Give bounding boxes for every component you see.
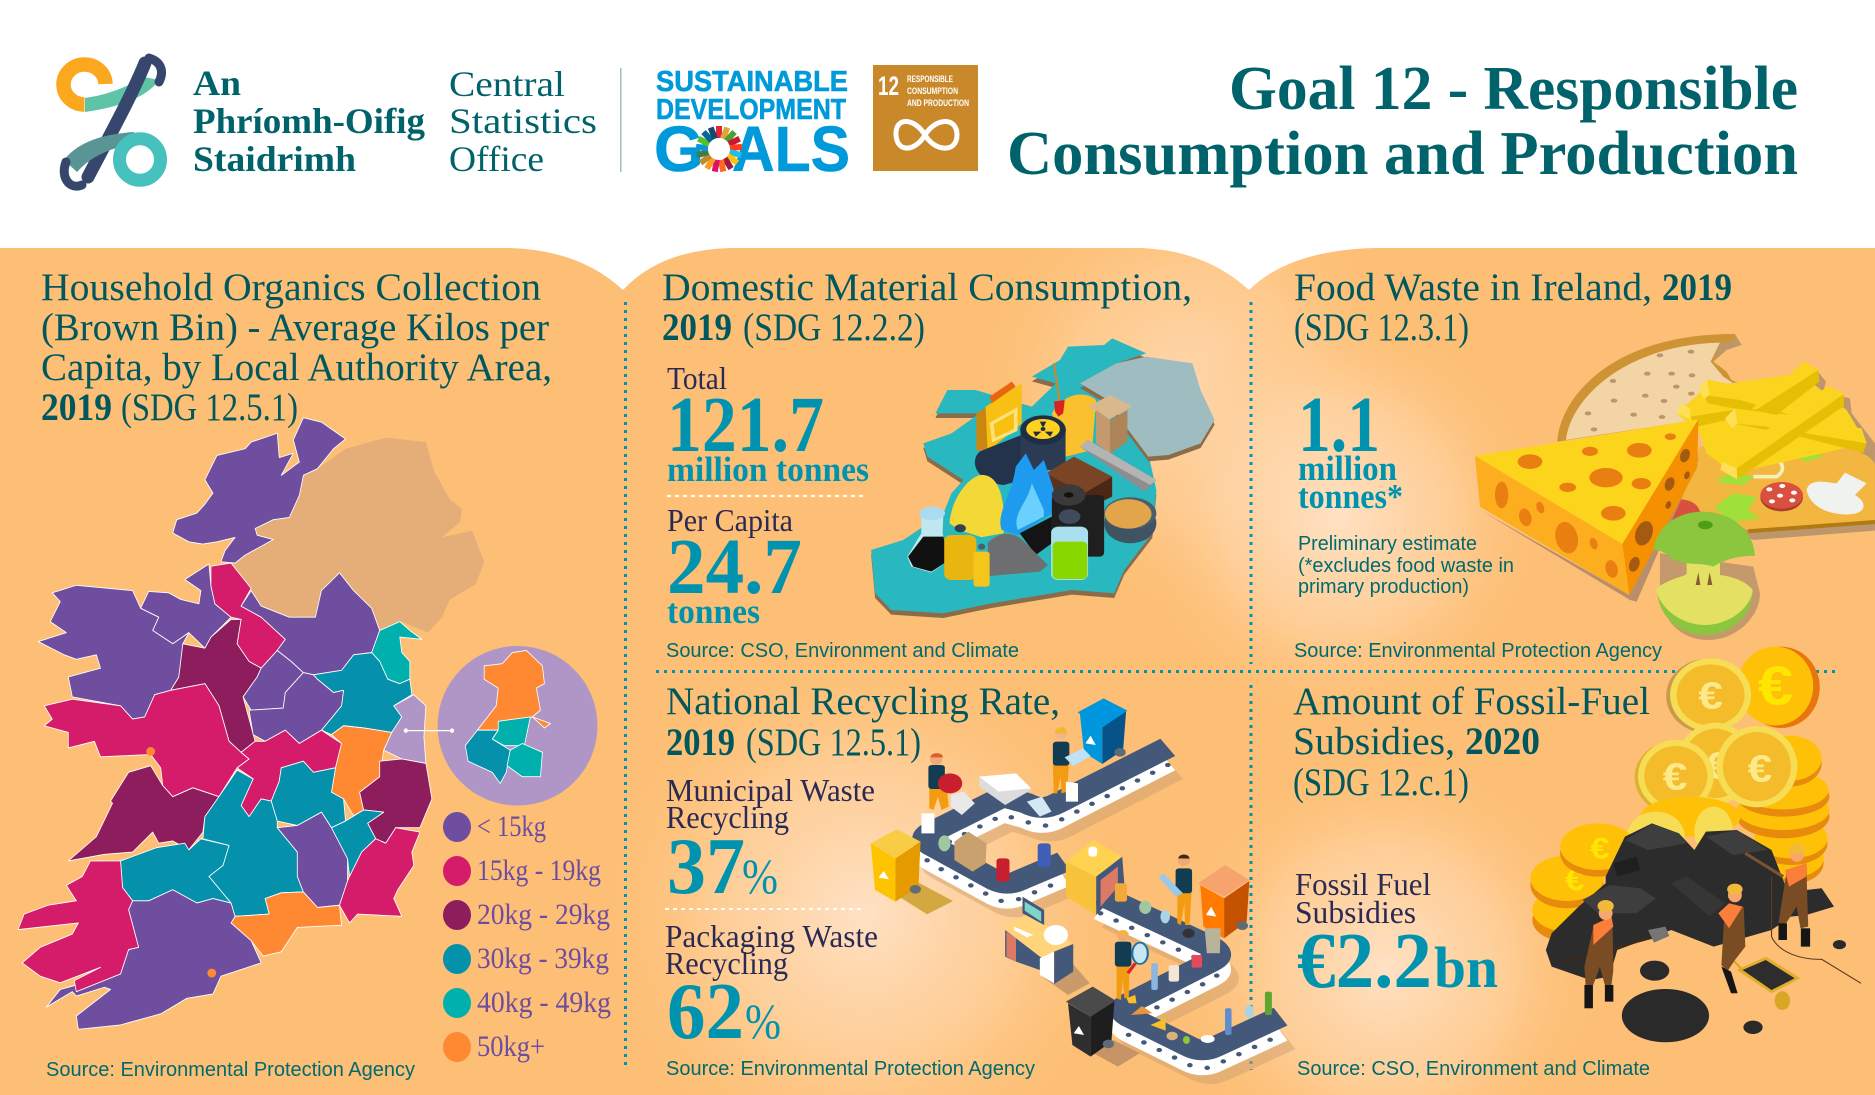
- logo text: Irish name: Staidrimh: [193, 139, 356, 179]
- workers: [928, 727, 1192, 1000]
- heading: fossil fuel subsidies: [1293, 680, 1650, 804]
- jerrycan: [976, 382, 1022, 452]
- panel: fossil fuel subsidies: [1293, 647, 1861, 1080]
- stat: per capita: tonnes: [667, 592, 760, 631]
- legend: [443, 810, 611, 1063]
- note: food waste: (*excludes food waste in: [1298, 555, 1514, 577]
- header: [64, 55, 1798, 188]
- illustration: food: [1475, 334, 1875, 640]
- stat: packaging waste recycling: [665, 918, 878, 1056]
- blue bin: [1078, 698, 1127, 764]
- logo text: English name: [449, 64, 597, 179]
- black pipe roll: [1020, 484, 1104, 557]
- source: panel 4: Source: Environmental Protection Agency: [666, 1058, 1035, 1080]
- icon: goal 12 badge: RESPONSIBLE: [907, 74, 953, 84]
- coin: middle left: €: [1705, 743, 1730, 787]
- logo text: Irish name: [193, 63, 425, 179]
- SDG wordmark: SUSTAINABLE: [656, 66, 848, 98]
- heading: national recycling rate: National Recycling Rate,: [666, 680, 1060, 723]
- icon: goal 12 badge: CONSUMPTION: [907, 86, 958, 96]
- icon: SDG colour wheel: [696, 126, 742, 172]
- heading: fossil fuel subsidies: 2020: [1465, 720, 1540, 763]
- stat: municipal waste recycling: [666, 772, 875, 911]
- heading: domestic material consumption: (SDG 12.2.2): [743, 306, 925, 349]
- coal rocks and pile: [1622, 940, 1846, 1042]
- stat: total: million tonnes: [667, 450, 869, 489]
- coin stack: right: [1737, 736, 1829, 885]
- steel bar: [1080, 440, 1156, 492]
- heading: household organics: (Brown Bin) - Average Kilos per: [41, 306, 549, 349]
- heading: fossil fuel subsidies: Subsidies,: [1293, 720, 1455, 763]
- shovel: [1054, 363, 1065, 417]
- title: [1007, 55, 1798, 188]
- conveyor: upper belt: [926, 747, 1176, 907]
- stat: total: 121.7: [667, 382, 824, 469]
- panel: domestic material consumption: [662, 266, 1215, 662]
- coin stack: centre and left: €: [1565, 863, 1584, 896]
- legend: 40kg - 49kg: [477, 986, 611, 1019]
- SDG wordmark: ALS: [732, 113, 850, 185]
- stat: food waste: million: [1298, 449, 1397, 488]
- stat: packaging waste recycling: %: [745, 993, 781, 1049]
- conveyor: lower belt: [1101, 895, 1288, 1074]
- logo text: English name: Statistics: [449, 101, 597, 141]
- coin: middle right: [1716, 726, 1797, 807]
- stat: per capita: [667, 502, 802, 631]
- city marker: Galway: [146, 747, 155, 756]
- logo text: Irish name: An: [193, 63, 241, 103]
- legend: 50kg+: [477, 1030, 545, 1063]
- yellow bottles: [944, 524, 990, 587]
- heading: household organics: Household Organics Collection: [41, 266, 541, 309]
- rock: [988, 534, 1048, 576]
- heading: food waste: 2019: [1662, 266, 1732, 309]
- gold ore: [1052, 395, 1096, 457]
- wheelbarrow: [1723, 950, 1800, 1010]
- logo text: English name: Office: [449, 139, 544, 179]
- bowl of sand: [1104, 497, 1156, 543]
- yellow bin: [871, 829, 953, 914]
- coin: front: €: [1663, 754, 1687, 798]
- apple core: [1653, 512, 1760, 640]
- source: panel 5: Source: CSO, Environment and Climate: [1297, 1058, 1650, 1080]
- scanning machine: [1066, 840, 1124, 915]
- pizza slice: [1660, 433, 1875, 540]
- dotted dividers: [626, 302, 1840, 1070]
- worker: top: [1053, 727, 1091, 793]
- icon: goal 12 badge: [873, 65, 978, 171]
- air hose: [1772, 877, 1861, 983]
- city marker: Cork: [207, 969, 216, 977]
- coin: top left: €: [1698, 673, 1723, 717]
- stat: food waste: 1.1: [1298, 382, 1380, 469]
- worker: inspector: [1115, 930, 1148, 1000]
- legend: 20kg - 29kg: [477, 898, 610, 931]
- worker: left: [928, 753, 962, 810]
- legend: 30kg - 39kg: [477, 942, 609, 975]
- illustration: coins, coal and miners: [1530, 647, 1861, 1042]
- coin: front: [1635, 740, 1714, 813]
- miner: drill: [1745, 844, 1810, 947]
- coin: top right: €: [1758, 654, 1793, 716]
- stat: food waste: [1298, 382, 1403, 516]
- map of Ireland by local authority: [18, 418, 597, 1029]
- legend: < 15kg: [477, 810, 546, 843]
- miner: shovel: [1563, 900, 1669, 1008]
- stat: fossil fuel subsidies: bn: [1434, 935, 1498, 1000]
- heading: fossil fuel subsidies: Amount of Fossil-Fuel: [1293, 680, 1650, 723]
- coin stack: centre and left: €: [1590, 832, 1610, 865]
- coal heap: [1546, 823, 1834, 980]
- cardboard box: [1088, 395, 1132, 453]
- source: panel 2: Source: CSO, Environment and Climate: [666, 640, 1019, 662]
- SDG wordmark: [654, 66, 850, 185]
- coin: middle left: [1677, 723, 1754, 804]
- wood stack: [1046, 457, 1112, 510]
- source: panel 1: Source: Environmental Protection Agency: [46, 1059, 415, 1081]
- stat: municipal waste recycling: %: [742, 848, 778, 904]
- heading: national recycling rate: 2019: [666, 721, 735, 764]
- stat: municipal waste recycling: Recycling: [666, 799, 789, 835]
- inset: Dublin circle: [404, 646, 597, 806]
- illustration: recycling conveyor: [871, 698, 1288, 1074]
- stat: packaging waste recycling: 62: [667, 968, 744, 1056]
- logo text: English name: Central: [449, 64, 565, 104]
- radioactive barrel: [1020, 415, 1066, 470]
- bread slice: [1557, 334, 1742, 442]
- panel: food waste: [1294, 266, 1875, 662]
- stat: fossil fuel subsidies: Fossil Fuel: [1295, 866, 1431, 902]
- chips: [1677, 362, 1875, 479]
- coin: middle right: €: [1748, 747, 1772, 790]
- desk with monitor: [1003, 897, 1090, 995]
- SDG wordmark: DEVELOPMENT: [656, 94, 846, 126]
- heading: national recycling rate: (SDG 12.5.1): [746, 721, 921, 764]
- legend: 15kg - 19kg: [477, 854, 601, 887]
- worker: right: [1158, 854, 1192, 925]
- illustration: materials on Ireland map: [871, 338, 1215, 618]
- coin stack: centre and left: [1530, 797, 1741, 942]
- stat: fossil fuel subsidies: [1295, 866, 1498, 1005]
- heading: food waste: Food Waste in Ireland,: [1294, 266, 1652, 309]
- icon: CSO logo: [64, 58, 162, 186]
- stat: total: Total: [667, 360, 727, 396]
- hay: [949, 475, 1004, 537]
- stat: fossil fuel subsidies: €2.2: [1297, 918, 1432, 1005]
- stat: per capita: Per Capita: [667, 502, 793, 538]
- note: food waste: primary production): [1298, 576, 1469, 598]
- orange bin: [1198, 865, 1249, 938]
- stat: packaging waste recycling: Recycling: [665, 945, 788, 981]
- flask: [907, 507, 949, 573]
- heading: national recycling rate: [666, 680, 1060, 764]
- logo text: Irish name: Phríomh-Oifig: [193, 101, 425, 141]
- heading: household organics: 2019: [41, 386, 112, 429]
- note: food waste: [1298, 533, 1514, 598]
- stat: per capita: 24.7: [667, 524, 802, 611]
- miner: wheelbarrow: [1718, 884, 1745, 993]
- black bin: [1066, 987, 1140, 1067]
- panel: national recycling rate: [665, 680, 1288, 1080]
- panel: household organics: [18, 266, 611, 1081]
- note: food waste: Preliminary estimate: [1298, 533, 1477, 555]
- blue flame: [1000, 453, 1054, 535]
- heading: food waste: (SDG 12.3.1): [1294, 306, 1469, 349]
- stat: fossil fuel subsidies: Subsidies: [1295, 894, 1416, 930]
- stat: food waste: tonnes*: [1298, 477, 1403, 516]
- stat: municipal waste recycling: Municipal Waste: [666, 772, 875, 808]
- icon: goal 12 badge: AND PRODUCTION: [907, 98, 969, 108]
- icon: goal 12 badge: 12: [878, 71, 899, 101]
- heading: domestic material consumption: 2019: [662, 306, 732, 349]
- coin: top right: [1738, 647, 1820, 728]
- heading: food waste: [1294, 266, 1732, 349]
- map base: [871, 343, 1156, 618]
- heading: household organics: Capita, by Local Authority Area,: [41, 346, 552, 389]
- recyclable items on belts: [921, 773, 1272, 1044]
- source: panel 3: Source: Environmental Protection Agency: [1294, 640, 1662, 662]
- barrel on its side: [975, 433, 1036, 485]
- heading: domestic material consumption: Domestic Material Consumption,: [662, 266, 1192, 309]
- SDG wordmark: G: [654, 113, 704, 185]
- stat: packaging waste recycling: Packaging Waste: [665, 918, 878, 954]
- cheese wedge: [1475, 419, 1698, 602]
- heading: fossil fuel subsidies: (SDG 12.c.1): [1293, 761, 1469, 804]
- heading: domestic material consumption: [662, 266, 1192, 349]
- heading: household organics: [41, 266, 552, 429]
- title: Goal 12 - Responsible: [1229, 55, 1798, 123]
- heading: household organics: (SDG 12.5.1): [121, 386, 298, 429]
- scalloped orange panel background: [0, 248, 1875, 1095]
- title: Consumption and Production: [1007, 120, 1798, 188]
- stat: municipal waste recycling: 37: [667, 823, 745, 911]
- coin: top left: [1666, 658, 1751, 733]
- stat: total: [667, 360, 869, 489]
- green bottle: [1051, 509, 1088, 580]
